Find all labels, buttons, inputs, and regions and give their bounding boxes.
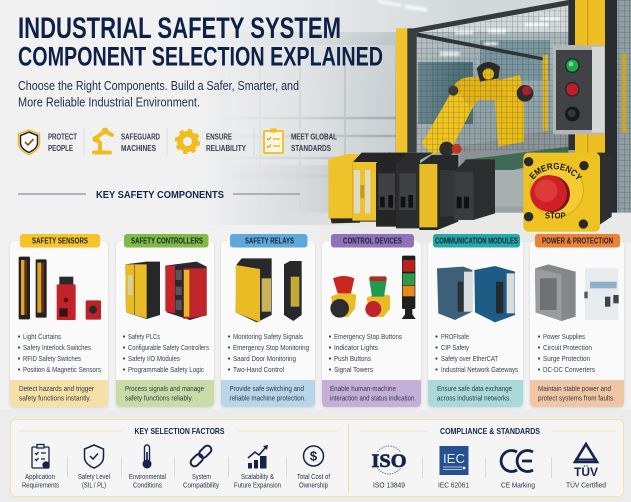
product image: light curtains and interlock switches bbox=[19, 257, 101, 320]
benefits row bbox=[18, 128, 337, 155]
benefit text: protect people bbox=[48, 132, 77, 153]
robot arm bbox=[422, 62, 568, 207]
product image: buttons and signal tower bbox=[330, 256, 416, 319]
pill heading bbox=[331, 234, 414, 248]
summary text: reliable machine protection. bbox=[230, 394, 306, 402]
heading: key selection factors: KEY SELECTION FACTORS bbox=[134, 427, 225, 436]
summary text bbox=[230, 384, 306, 402]
benefit text: safeguard machines: SAFEGUARD bbox=[121, 132, 160, 142]
factor: safety level: (SIL / PL) bbox=[82, 482, 106, 490]
logo: ISO 13849 bbox=[371, 446, 407, 490]
fence posts and rails bbox=[396, 0, 575, 152]
logo: IEC 62061 bbox=[438, 446, 469, 490]
bullet list bbox=[18, 332, 101, 374]
pill heading: CONTROL DEVICES bbox=[343, 236, 403, 246]
bullet list: Push Buttons bbox=[334, 354, 371, 363]
title: INDUSTRIAL SAFETY SYSTEM bbox=[18, 12, 341, 45]
logo: ISO 13849: ISO bbox=[372, 451, 406, 472]
summary text: Ensure safe data exchange bbox=[437, 384, 512, 393]
table surface bbox=[280, 213, 631, 243]
bullet list: Monitoring Safety Signals bbox=[233, 332, 303, 341]
bullet list: Industrial Network Gateways bbox=[441, 365, 518, 374]
factor: scalability and future expansion: Future Expansion bbox=[234, 482, 281, 490]
panel: bottom strip bbox=[0, 410, 631, 502]
bullet list: Emergency Stop Monitoring bbox=[233, 343, 309, 352]
control box with indicator lights bbox=[553, 45, 605, 134]
emergency stop button box: STOP bbox=[545, 211, 566, 221]
pill heading bbox=[535, 234, 620, 248]
title: COMPONENT SELECTION EXPLAINED bbox=[18, 42, 383, 72]
logo: IEC 62061: IEC bbox=[443, 452, 465, 466]
summary text: across industrial networks. bbox=[437, 394, 511, 402]
summary text bbox=[330, 384, 416, 402]
pill heading bbox=[433, 234, 520, 248]
summary text bbox=[125, 384, 204, 402]
benefit text: meet global standards bbox=[291, 132, 337, 153]
bullet list: CIP Safety bbox=[441, 343, 469, 352]
logo: ISO 13849: ISO 13849 bbox=[373, 482, 405, 490]
factor: environmental conditions bbox=[129, 445, 166, 490]
bullet list: Safety Interlock Switches bbox=[23, 343, 91, 352]
bullet list bbox=[329, 332, 402, 374]
pill heading: COMMUNICATION MODULES bbox=[435, 236, 518, 246]
emergency stop button box bbox=[523, 152, 612, 232]
panel: communication modules bbox=[428, 234, 523, 407]
bullet list: Safety PLCs bbox=[128, 332, 160, 341]
factor: application requirements: Application bbox=[25, 474, 55, 481]
bullet list: DC-DC Converters bbox=[543, 365, 595, 374]
bullet list: Safety I/O Modules bbox=[128, 354, 180, 363]
factor: total cost of ownership: Total Cost of bbox=[297, 474, 330, 481]
summary text: Detect hazards and trigger bbox=[19, 384, 94, 393]
icon: shield bbox=[18, 130, 40, 154]
title bbox=[18, 12, 383, 72]
subtitle: More Reliable Industrial Environment. bbox=[18, 94, 200, 110]
bullet list: Configurable Safety Controllers bbox=[128, 343, 209, 352]
factor: environmental conditions: Environmental bbox=[129, 474, 166, 481]
icon: clipboard bbox=[264, 128, 283, 153]
panel: safety controllers bbox=[116, 234, 214, 407]
bullet list: RFID Safety Switches bbox=[23, 354, 81, 363]
bullet list: Power Supplies bbox=[543, 332, 585, 341]
factor: application requirements: Requirements bbox=[22, 482, 59, 490]
bullet list: Circuit Protection bbox=[543, 343, 592, 352]
summary text: Maintain stable power and bbox=[538, 384, 611, 393]
row of safety relay modules bbox=[328, 153, 495, 230]
factor: environmental conditions: Conditions bbox=[133, 482, 162, 490]
pill heading: SAFETY SENSORS bbox=[32, 236, 89, 246]
summary text bbox=[437, 384, 512, 402]
pill heading bbox=[124, 234, 208, 248]
product image: communication modules bbox=[437, 266, 515, 322]
logo: CE marking: CE Marking bbox=[501, 482, 535, 490]
panel: power and protection bbox=[530, 234, 624, 407]
pill heading bbox=[20, 234, 100, 248]
section heading: key safety components: KEY SAFETY COMPONENTS bbox=[96, 189, 224, 201]
bullet list: Emergency Stop Buttons bbox=[334, 332, 402, 341]
factor: safety level: Safety Level bbox=[78, 474, 110, 481]
bullet list bbox=[435, 332, 518, 374]
bullet list bbox=[228, 332, 309, 374]
logo: CE marking bbox=[501, 450, 535, 490]
benefit text: meet global standards: MEET GLOBAL bbox=[291, 132, 337, 142]
summary text: Provide safe switching and bbox=[230, 384, 304, 393]
benefit text: ensure reliability: ENSURE bbox=[206, 132, 233, 142]
benefit text: ensure reliability bbox=[206, 132, 247, 153]
benefit text: safeguard machines: MACHINES bbox=[121, 144, 157, 153]
bullet list: PROFIsafe bbox=[441, 332, 469, 341]
bullet list: Surge Protection bbox=[543, 354, 590, 363]
factor: system compatibility bbox=[183, 444, 219, 490]
factor: total cost of ownership: Ownership bbox=[299, 482, 328, 490]
summary text: protect systems from faults. bbox=[538, 394, 615, 402]
summary text: Enable human-machine bbox=[330, 384, 396, 393]
bullet list: Programmable Safety Logic bbox=[128, 365, 204, 374]
benefit text: meet global standards: STANDARDS bbox=[291, 144, 332, 153]
bullet list: Saard Door Monitoring bbox=[233, 354, 296, 363]
bullet list: Light Curtains bbox=[23, 332, 61, 341]
emergency stop button box: EMERGENCY bbox=[529, 163, 582, 180]
logo: IEC 62061: IEC 62061 bbox=[438, 482, 469, 490]
logo: TUV certified bbox=[566, 444, 606, 490]
bullet list: Indicator Lights bbox=[334, 343, 378, 352]
summary text bbox=[538, 384, 615, 402]
benefit text: ensure reliability: RELIABILITY bbox=[206, 144, 247, 153]
factor: application requirements bbox=[22, 444, 59, 490]
wire mesh bbox=[417, 0, 631, 213]
bullet list: Position & Magnetic Sensors bbox=[23, 365, 101, 374]
icon: robot arm bbox=[93, 128, 112, 152]
factor: safety level bbox=[78, 445, 110, 490]
icon: gear bbox=[176, 130, 198, 152]
panel: safety sensors bbox=[10, 234, 108, 407]
bullet list: Safety over EtherCAT bbox=[441, 354, 498, 363]
logo: TUV certified: TÜV bbox=[574, 464, 598, 479]
summary text: Process signals and manage bbox=[125, 384, 204, 393]
factor: system compatibility: System bbox=[192, 474, 211, 481]
pill heading: SAFETY RELAYS bbox=[245, 236, 294, 246]
product image: safety relays bbox=[236, 258, 302, 322]
summary text: interaction and status indication. bbox=[330, 394, 416, 402]
benefit text: protect people: PROTECT bbox=[48, 132, 77, 142]
product image: power supply and circuit breaker bbox=[535, 264, 619, 321]
subtitle: Choose the Right Components. Build a Safer, Smarter, and bbox=[18, 78, 299, 93]
heading: compliance and standards: COMPLIANCE & STANDARDS bbox=[440, 427, 540, 436]
bullet list: Two-Hand Control bbox=[233, 365, 284, 374]
summary text bbox=[19, 384, 94, 402]
summary text: safety functions reliably. bbox=[125, 394, 193, 402]
product image: safety controllers bbox=[125, 262, 207, 320]
factor: total cost of ownership bbox=[297, 446, 330, 490]
bullet list: Signal Towers bbox=[334, 365, 373, 374]
benefit text: protect people: PEOPLE bbox=[48, 144, 74, 153]
factor: total cost of ownership: $ bbox=[310, 448, 318, 464]
logo: TUV certified: TÜV Certified bbox=[566, 482, 606, 490]
summary text: safety functions instantly. bbox=[19, 394, 91, 402]
panel: safety relays bbox=[221, 234, 315, 407]
pill heading: SAFETY CONTROLLERS bbox=[131, 236, 203, 246]
pill heading bbox=[230, 234, 308, 248]
factor: scalability and future expansion bbox=[234, 445, 281, 490]
bullet list bbox=[123, 332, 209, 374]
factor: scalability and future expansion: Scalability & bbox=[241, 474, 274, 481]
panel: control devices bbox=[322, 234, 421, 407]
benefit text: safeguard machines bbox=[121, 132, 160, 153]
yellow column bbox=[575, 0, 626, 213]
factor: system compatibility: Compatibility bbox=[183, 482, 219, 490]
subtitle bbox=[18, 78, 299, 110]
hero photo: factory with safety fence and robot bbox=[230, 0, 631, 242]
bullet list bbox=[538, 332, 595, 374]
